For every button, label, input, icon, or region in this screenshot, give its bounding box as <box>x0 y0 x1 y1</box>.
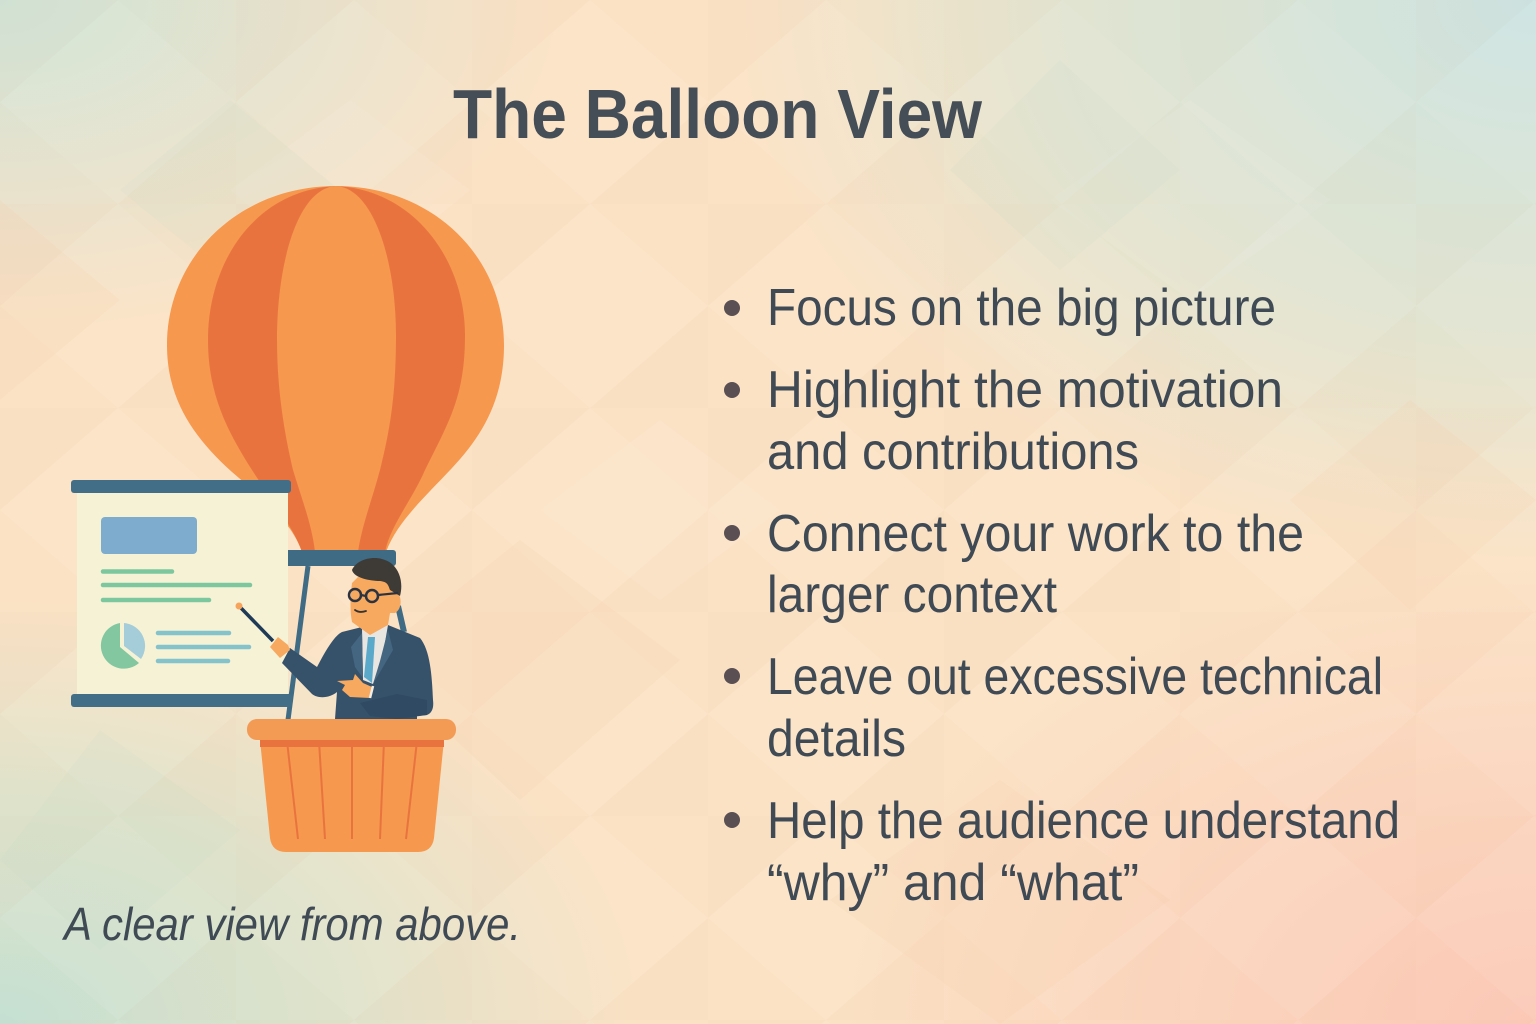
presenter <box>236 558 433 719</box>
bullet 3 <box>724 505 1304 624</box>
balloon ring and struts <box>280 550 404 720</box>
suit <box>282 625 433 719</box>
bullet 2: and contributions <box>767 423 1139 481</box>
bullet 1: Focus on the big picture <box>767 279 1276 337</box>
pointer <box>236 602 273 641</box>
bullet 4: Leave out excessive technical <box>767 648 1383 706</box>
hand on pointer <box>270 637 290 658</box>
balloon envelope <box>167 186 504 552</box>
slide heading block <box>101 517 197 554</box>
bullet 5: “why” and “what” <box>767 854 1139 912</box>
slide chart lines <box>158 633 249 661</box>
presentation screen <box>71 480 292 707</box>
bullet 2: Highlight the motivation <box>767 361 1283 419</box>
bullet 3: larger context <box>767 566 1058 624</box>
bullet list <box>724 279 1400 912</box>
title: The Balloon View <box>453 75 982 153</box>
head <box>349 558 401 635</box>
shirt and tie <box>351 625 393 684</box>
illustration: hot air balloon with presenter <box>71 186 504 852</box>
basket <box>247 719 456 852</box>
sleeve shading <box>360 694 427 719</box>
pie chart <box>101 623 145 669</box>
caption: A clear view from above. <box>61 898 521 950</box>
hand on chest <box>337 674 373 698</box>
bullet 5: Help the audience understand <box>767 792 1400 850</box>
bullet 4 <box>724 648 1383 768</box>
slide text lines <box>103 572 250 600</box>
bullet 2 <box>724 361 1283 481</box>
bullet 5 <box>724 792 1400 912</box>
bullet 4: details <box>767 710 906 768</box>
bullet 3: Connect your work to the <box>767 505 1304 563</box>
